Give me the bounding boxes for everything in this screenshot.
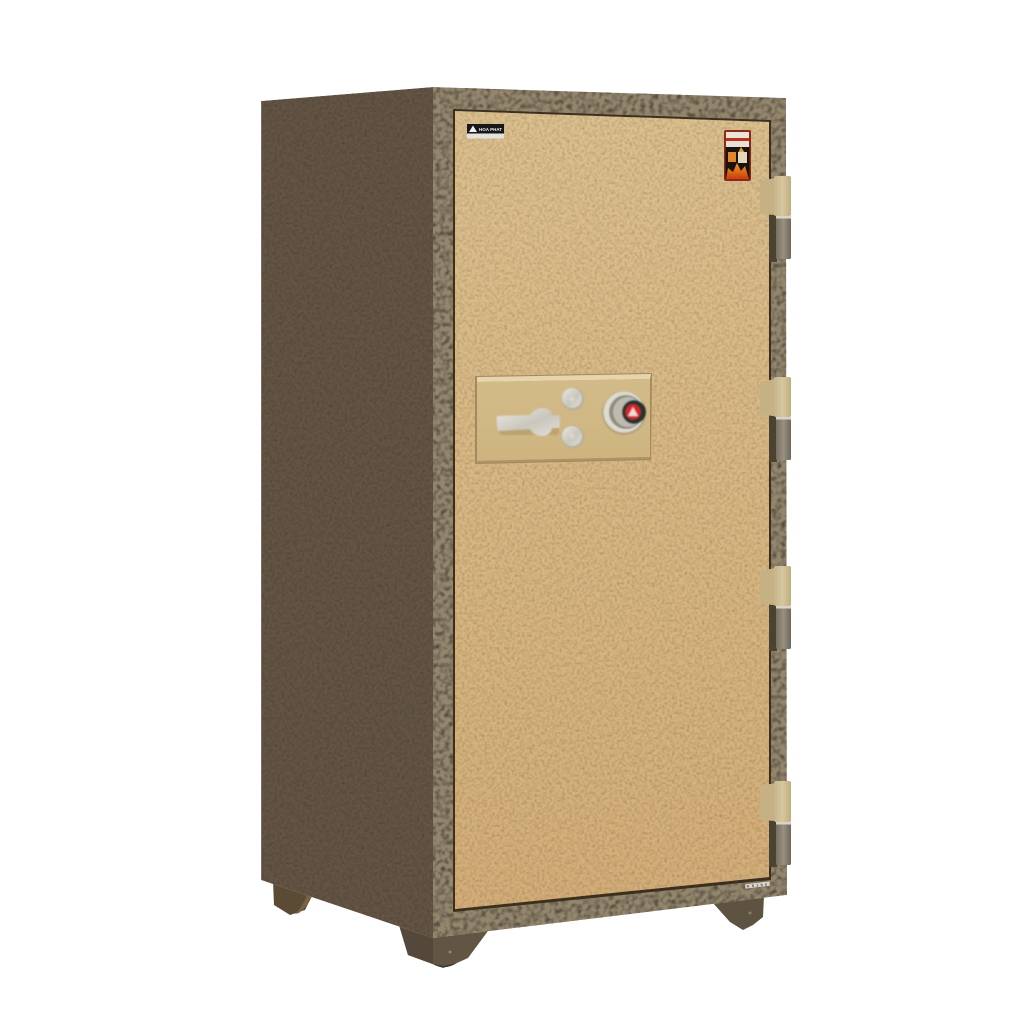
hinge 1 <box>760 176 791 262</box>
front corner foot <box>399 925 488 968</box>
model plate: KS190 <box>747 883 767 888</box>
lower key lock <box>562 426 584 448</box>
hinge 2 <box>760 377 791 462</box>
hinge 4 <box>760 781 791 867</box>
side panel <box>261 87 433 938</box>
lock panel <box>475 373 652 464</box>
handle <box>497 408 560 436</box>
model plate <box>745 881 770 889</box>
upper key lock <box>562 388 584 410</box>
combination dial <box>602 391 646 435</box>
rear left foot <box>273 880 312 915</box>
front frame <box>433 87 787 938</box>
maker logo plate <box>467 124 504 138</box>
door <box>453 109 771 912</box>
fire-resistance certification label <box>724 130 751 181</box>
rear right foot <box>713 896 764 930</box>
maker logo plate: HOA PHAT <box>479 127 502 132</box>
hinge 3 <box>760 566 791 651</box>
